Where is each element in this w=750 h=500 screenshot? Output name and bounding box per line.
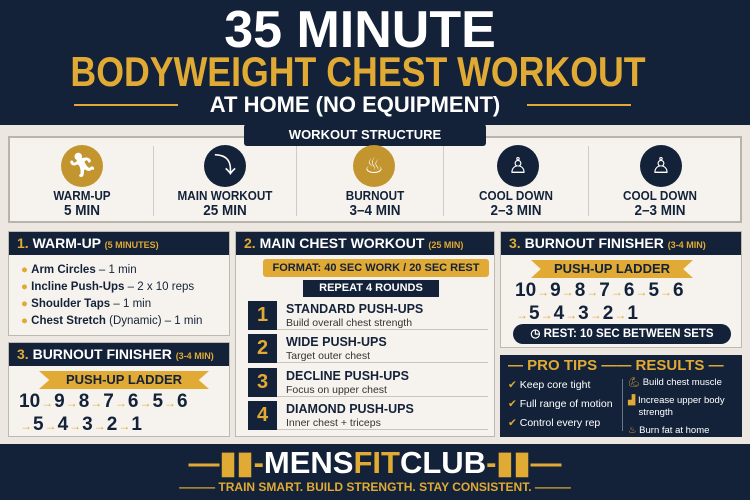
structure tab xyxy=(244,124,486,146)
exercise 4: DIAMOND PUSH-UPS xyxy=(286,402,414,416)
icon: warm-up: 🏃︎ xyxy=(67,152,97,179)
exercise 1: 1 xyxy=(257,304,268,326)
footer background xyxy=(0,444,750,500)
ladder numbers: 10→9→8→7→6→5→6 xyxy=(19,391,188,412)
label: cool down 2: COOL DOWN xyxy=(623,188,697,203)
format banner xyxy=(263,259,489,277)
pro tips heading: — PRO TIPS —— RESULTS — xyxy=(508,357,724,374)
exercise 3: 3 xyxy=(257,371,268,393)
header background xyxy=(0,0,750,125)
panel: main chest workout xyxy=(235,231,495,437)
tips list: ✔ Keep core tight xyxy=(508,379,590,391)
exercise 1 xyxy=(248,301,488,330)
icon: main workout: ⤵ xyxy=(214,153,236,178)
repeat box xyxy=(303,280,439,297)
icon: cool down xyxy=(497,145,539,187)
label: warm-up xyxy=(53,188,111,219)
icon: cool down: ♙ xyxy=(508,153,528,178)
exercise 4: Inner chest + triceps xyxy=(286,417,381,429)
exercise 2 xyxy=(248,334,488,363)
label: cool down xyxy=(479,188,553,219)
label: burnout: 3–4 MIN xyxy=(349,202,401,219)
burnout heading: 3. BURNOUT FINISHER (3-4 MIN) xyxy=(17,346,214,362)
panel: warm-up xyxy=(8,231,230,336)
title: 35 MINUTE xyxy=(224,1,496,59)
ladder numbers right xyxy=(515,280,684,324)
label: cool down 2 xyxy=(623,188,697,219)
tips list: ✔ Full range of motion xyxy=(508,398,613,410)
icon: cool down 2: ♙ xyxy=(651,153,671,178)
exercise 4: 4 xyxy=(257,404,268,426)
results list xyxy=(628,377,725,436)
ladder numbers right: →5→4→3→2→1 xyxy=(516,303,638,324)
ladder ribbon xyxy=(39,371,209,389)
repeat box: REPEAT 4 ROUNDS xyxy=(319,282,423,294)
label: burnout xyxy=(346,188,404,219)
ladder numbers right: 10→9→8→7→6→5→6 xyxy=(515,280,684,301)
panel: burnout right xyxy=(500,231,742,348)
logo: —▮▮-MENSFITCLUB-▮▮— xyxy=(188,445,562,480)
ladder numbers xyxy=(19,391,188,435)
rest pill: ◷ REST: 10 SEC BETWEEN SETS xyxy=(530,328,714,340)
label: main: MAIN WORKOUT xyxy=(178,188,272,203)
results list: 💪︎ Build chest muscle xyxy=(628,377,722,388)
warm-up heading xyxy=(9,232,229,255)
icon: cool down 2 xyxy=(640,145,682,187)
tagline: AT HOME (NO EQUIPMENT) xyxy=(210,92,500,117)
results list: strength xyxy=(639,407,673,418)
panel: workout structure xyxy=(8,136,742,223)
rest pill xyxy=(513,324,731,344)
burnout heading right xyxy=(501,232,741,255)
warm-up list xyxy=(21,264,202,327)
exercise 2: 2 xyxy=(257,337,268,359)
exercise 3: Focus on upper chest xyxy=(286,384,387,396)
exercise 2: Target outer chest xyxy=(286,350,370,362)
results list: ▟ Increase upper body xyxy=(628,395,725,406)
tips list xyxy=(508,379,613,429)
ladder ribbon right: PUSH-UP LADDER xyxy=(554,261,670,276)
ladder numbers: →5→4→3→2→1 xyxy=(20,414,142,435)
panel: pro tips & results xyxy=(500,355,742,437)
icon: burnout xyxy=(353,145,395,187)
warm-up list: ● Incline Push-Ups – 2 x 10 reps xyxy=(21,281,194,293)
label: main xyxy=(178,188,272,219)
exercise 3: DECLINE PUSH-UPS xyxy=(286,369,409,383)
label: warm-up: WARM-UP xyxy=(53,188,111,203)
warm-up heading: 1. WARM-UP (5 MINUTES) xyxy=(17,235,159,251)
label: cool down 2: 2–3 MIN xyxy=(634,202,686,219)
exercise 4 xyxy=(248,401,488,430)
ladder ribbon right xyxy=(531,260,693,278)
icon: main workout xyxy=(204,145,246,187)
subtitle: BODYWEIGHT CHEST WORKOUT xyxy=(70,48,646,95)
burnout heading xyxy=(9,343,229,366)
exercise 3 xyxy=(248,368,488,397)
results list: ♨ Burn fat at home xyxy=(628,425,709,436)
warm-up list: ● Arm Circles – 1 min xyxy=(21,264,137,276)
format banner: FORMAT: 40 SEC WORK / 20 SEC REST xyxy=(272,262,480,274)
label: burnout: BURNOUT xyxy=(346,188,404,203)
label: main: 25 MIN xyxy=(203,202,247,219)
ladder ribbon: PUSH-UP LADDER xyxy=(66,372,182,387)
label: warm-up: 5 MIN xyxy=(64,202,100,219)
burnout heading right: 3. BURNOUT FINISHER (3-4 MIN) xyxy=(509,235,706,251)
exercise 1: Build overall chest strength xyxy=(286,317,412,329)
main heading xyxy=(236,232,494,255)
icon: warm-up xyxy=(61,145,103,187)
exercise 1: STANDARD PUSH-UPS xyxy=(286,302,423,316)
main heading: 2. MAIN CHEST WORKOUT (25 MIN) xyxy=(244,235,463,251)
exercise 2: WIDE PUSH-UPS xyxy=(286,335,387,349)
warm-up list: ● Chest Stretch (Dynamic) – 1 min xyxy=(21,315,202,327)
warm-up list: ● Shoulder Taps – 1 min xyxy=(21,298,151,310)
footer tagline: ——— TRAIN SMART. BUILD STRENGTH. STAY CONSISTENT. ——— xyxy=(179,480,571,494)
tips list: ✔ Control every rep xyxy=(508,417,600,429)
panel: burnout left xyxy=(8,342,230,437)
icon: burnout: ♨ xyxy=(364,153,384,178)
label: cool down: 2–3 MIN xyxy=(490,202,542,219)
label: cool down: COOL DOWN xyxy=(479,188,553,203)
structure tab: WORKOUT STRUCTURE xyxy=(289,127,441,142)
